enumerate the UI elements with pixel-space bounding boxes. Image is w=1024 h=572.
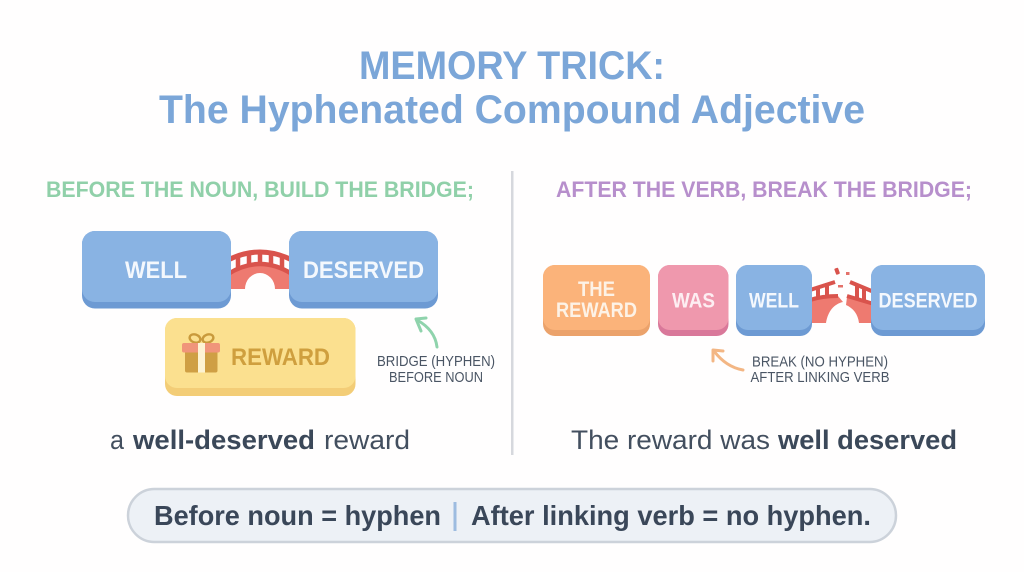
box: well [82,231,231,308]
example sentence: left: a [110,425,125,455]
arrow: orange [713,350,743,370]
box: reward [165,318,356,396]
title: The Hyphenated Compound Adjective [159,88,865,132]
heading: break the bridge: AFTER THE VERB, BREAK THE BRIDGE; [556,177,972,202]
panel: before the noun [46,177,495,455]
heading: build the bridge: BEFORE THE NOUN, BUILD THE BRIDGE; [46,177,474,202]
summary pill [128,489,896,542]
panel: after the verb [543,177,985,455]
note: break [750,354,890,386]
box: well: WELL [749,290,799,312]
summary pill: Before noun = hyphen [154,500,441,531]
box: deserved: DESERVED [878,290,978,312]
icon: bridge [228,251,292,289]
box: deserved: DESERVED [303,257,424,284]
note: bridge [377,353,495,386]
box: the reward: THE [578,278,615,301]
box: was [658,265,728,336]
note: break: BREAK (NO HYPHEN) [752,354,888,370]
note: break: AFTER LINKING VERB [750,369,890,386]
summary pill: After linking verb = no hyphen. [471,500,871,531]
box: was: WAS [672,290,715,312]
example sentence: left: reward [324,425,410,455]
divider [511,171,514,455]
example sentence: right: well deserved [777,425,957,455]
title [159,44,865,132]
icon: broken bridge [808,267,875,323]
box: reward: REWARD [231,344,330,371]
note: bridge: BEFORE NOUN [389,369,483,386]
box: deserved [871,265,985,336]
box: well [736,265,812,336]
example sentence: left: well-deserved [132,425,315,455]
box: well: WELL [125,257,187,284]
example sentence: right: The reward was [571,425,770,455]
title: MEMORY TRICK: [359,44,665,88]
example sentence: right [571,425,957,455]
arrow: green [416,318,437,347]
box: the reward: REWARD [556,299,637,322]
box: the reward [543,265,650,336]
box: deserved [289,231,438,308]
note: bridge: BRIDGE (HYPHEN) [377,353,495,370]
example sentence: left [110,425,410,455]
icon: gift [182,333,220,372]
